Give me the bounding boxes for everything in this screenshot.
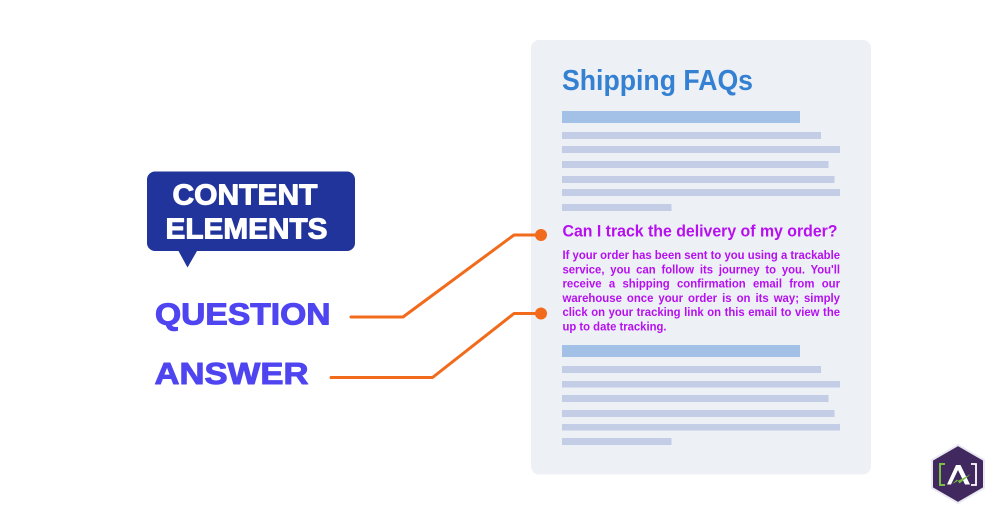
answer text: service, you can follow its journey to you. You'll [562, 262, 840, 276]
answer text: warehouse once your order is on its way; simply [562, 291, 840, 305]
answer text: up to date tracking. [562, 320, 666, 334]
placeholder block: bottom section [562, 345, 840, 445]
label: question: QUESTION [155, 296, 330, 332]
answer text: click on your tracking link on this email to view the [562, 305, 840, 319]
label: answer: ANSWER [154, 356, 308, 391]
placeholder block: top section [562, 111, 840, 211]
arrow: answer connector [331, 308, 547, 378]
callout: content elements: ELEMENTS [166, 214, 328, 246]
panel: FAQ document [531, 40, 871, 474]
answer text: receive a shipping confirmation email from our [562, 276, 840, 290]
answer text: If your order has been sent to you using a trackable [562, 248, 840, 262]
arrow: question connector [351, 229, 547, 317]
answer text [562, 248, 840, 334]
callout: content elements [147, 172, 355, 268]
heading: Shipping FAQs: Shipping FAQs [562, 65, 753, 97]
icon: logo badge [932, 445, 984, 503]
question text: Can I track the delivery of my order? [562, 222, 838, 240]
callout: content elements: CONTENT [172, 180, 318, 212]
